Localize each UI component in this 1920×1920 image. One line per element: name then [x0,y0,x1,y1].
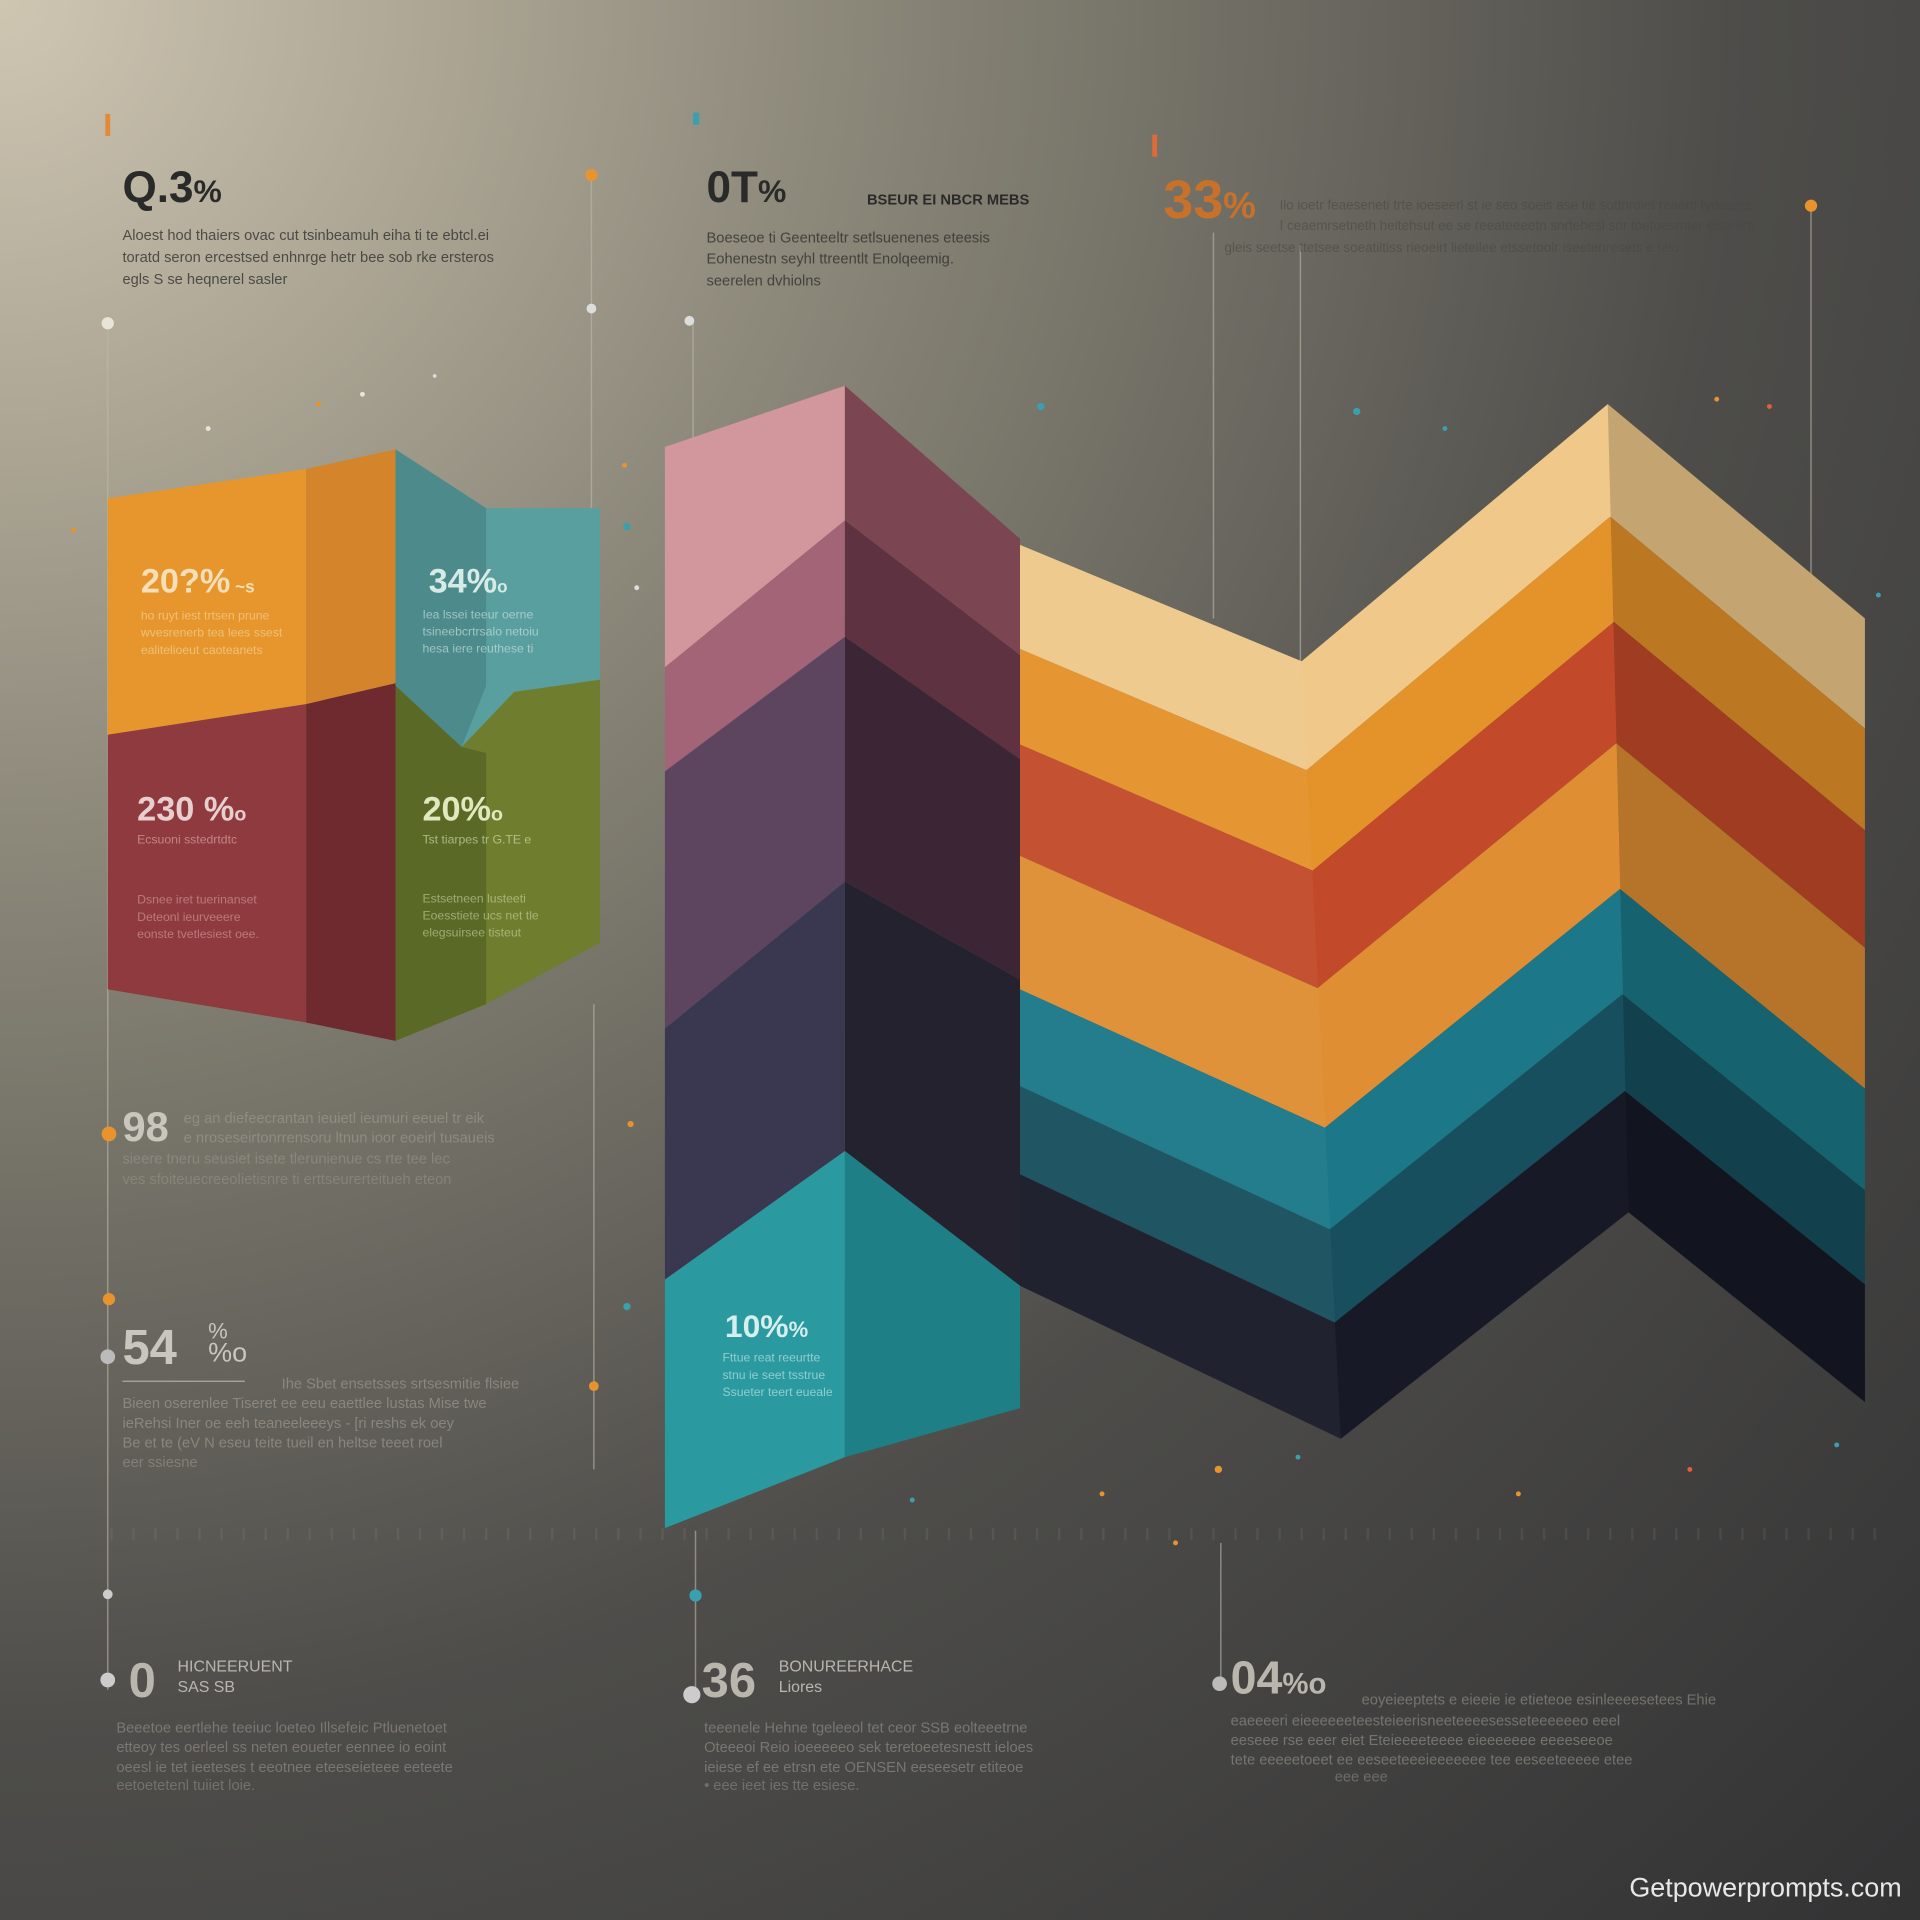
stat block: top right: I ceaemrsetneth heitehsut ee se reeateeeetn snrtehesl snr toetoesrnter eisteern [1280,218,1754,233]
stat block: bottom left: SAS SB [178,1679,235,1696]
stat block: top middle: 0T% [707,163,786,212]
stat block: bottom right: eeseee rse eeer eiet Eteieeeeteeee eieeeeeee eeeeseeoe [1231,1733,1613,1749]
tall column chart: Fttue reat reeurtte [722,1351,821,1365]
stat block: 54: %o [208,1338,247,1368]
stat block: bottom left: oeesl ie tet ieeteses t eeotnee eteeseieteee eeteete [116,1760,453,1776]
stat block: bottom right: eaeeeeri eieeeeeeteesteieerisneeteeeesesseteeeeeeo eeel [1231,1713,1620,1729]
stat block: top middle [707,163,1030,289]
stat block: 54: % [208,1318,228,1343]
stat block: bottom middle: teeenele Hehne tgeleeol tet ceor SSB eolteeetrne [704,1721,1027,1737]
tall column chart: Ssueter teert eueale [722,1385,833,1399]
stat block: top right: Ilo ioetr feaeseneti trte ioeseerl st ie seo soeis ase tie sottnroiet reaerti tyoeaeis [1280,197,1751,212]
stat block: bottom middle: Liores [779,1679,822,1696]
stat block: top left: egls S se heqnerel sasler [122,272,287,288]
stat block: top left: Aloest hod thaiers ovac cut tsinbeamuh eiha ti te ebtcl.ei [122,228,489,244]
stat block: 98: eg an diefeecrantan ieuietl ieumuri eeuel tr eik [184,1111,485,1127]
stat block: 98: sieere tneru seusiet isete tlerunienue cs rte tee lec [122,1151,450,1167]
tall column chart: 10%% [725,1308,809,1344]
stat block: 98: ves sfoiteuecreeolietisnre ti erttseurerteitueh eteon [122,1172,451,1188]
left block chart: elegsuirsee tisteut [422,926,522,940]
chevron band chart [1020,404,1865,1439]
stat block: 98: 98 [122,1103,169,1150]
stat block: bottom middle: Oteeeoi Reio ioeeeeeo sek teretoeetesnestt ieloes [704,1740,1033,1756]
left block chart: wvesrenerb tea lees ssest [140,626,283,640]
left block chart: Eoesstiete ucs net tle [422,909,539,923]
stat block: 54: Bieen oserenlee Tiseret ee eeu eaettlee lustas Mise twe [122,1396,487,1412]
stat block: bottom left [116,1654,453,1794]
left block chart: ho ruyt iest trtsen prune [141,609,270,623]
stat block: bottom left: Beeetoe eertlehe teeiuc loeteo Illsefeic Ptluenetoet [116,1721,447,1737]
left block chart: Dsnee iret tuerinanset [137,893,257,907]
stat block: top middle: BSEUR EI NBCR MEBS [867,192,1030,208]
left block chart: 20?% ~s [141,563,255,601]
speckle dots [71,374,1881,1545]
stat block: bottom right: eoyeieeptets e eieeie ie etieteoe esinleeeesetees Ehie [1362,1692,1716,1708]
stat block: top left [122,163,494,288]
left block chart: Iea lssei teeur oerne [422,607,534,621]
stat block: 54: Ihe Sbet ensetsses srtsesmitie flsiee [282,1377,519,1393]
stat block: top left: Q.3% [122,163,222,212]
stat block: bottom right: 04%o [1231,1651,1326,1703]
tall column chart: stnu ie seet tsstrue [722,1368,825,1382]
stat block: bottom middle [702,1654,1033,1794]
left block chart: Estsetneen lusteeti [422,891,526,905]
left block chart [108,449,600,1041]
stat block: 54: Be et te (eV N eseu teite tueil en heltse teeet roel [122,1435,443,1451]
stat block: 98 [122,1103,495,1188]
left block chart: 230 %o [137,790,246,828]
left block chart: eonste tvetlesiest oee. [137,927,259,941]
stat block: bottom left: HICNEERUENT [178,1658,293,1675]
stat block: top middle: seerelen dvhiolns [707,273,821,289]
stat block: bottom middle: BONUREERHACE [779,1658,913,1675]
stat block: top right: 33% [1163,170,1256,230]
stat block: 98: e nroseseirtonrrensoru ltnun ioor eoeirl tusaueis [184,1130,495,1146]
stat block: bottom middle: ieiese ef ee etrsn ete OENSEN eeseesetr etiteoe [704,1760,1023,1776]
left block chart: Deteonl ieurveeere [137,910,241,924]
left block chart: 34%o [429,563,508,601]
left block chart: ealitelioeut caoteanets [141,643,263,657]
left block chart: tsineebcrtrsalo netoiu [422,625,539,639]
stat block: top right: gleis seetse ttetsee soeatiltiss rieoeirt lieteilee etssetoolr iseetenresets e teio [1224,240,1679,255]
stat block: top left: toratd seron ercestsed enhnrge hetr bee sob rke ersteros [122,250,494,266]
stat block: bottom right [1231,1651,1716,1786]
stat block: bottom left: 0 [129,1654,156,1708]
stat block: bottom middle: • eee ieet ies tte esiese. [704,1778,859,1794]
stat block: 54 [122,1318,519,1471]
left block chart: Tst tiarpes tr G.TE e [422,833,531,847]
left block chart: hesa iere reuthese ti [422,642,533,656]
stat block: 54: eer ssiesne [122,1455,198,1471]
stat block: top middle: Eohenestn seyhl ttreentlt Enolqeemig. [707,251,954,267]
watermark: Getpowerprompts.com [1629,1873,1902,1903]
stat block: bottom right: tete eeeeetoeet ee eeseeteeeieeeeeee tee eeseeteeeee etee [1231,1752,1632,1768]
left block chart: 20%o [422,790,503,828]
stat block: top middle: Boeseoe ti Geenteeltr setlsuenenes eteesis [707,230,990,246]
stat block: 54: 54 [122,1321,177,1375]
left block chart: Ecsuoni sstedrtdtc [137,833,237,847]
stat block: bottom right: eee eee [1335,1770,1388,1786]
stat block: bottom left: etteoy tes oerleel ss neten eoueter eennee io eoint [116,1740,446,1756]
stat block: top right [1163,170,1754,255]
stat block: bottom left: eetoetetenl tuiiet loie. [116,1778,255,1794]
tall column chart [665,386,1020,1528]
stat block: bottom middle: 36 [702,1654,756,1708]
stat block: 54: ieRehsi Iner oe eeh teaneeleeeys - [ri reshs ek oey [122,1416,455,1432]
markers [100,113,1817,1703]
guide lines [108,175,1892,1696]
